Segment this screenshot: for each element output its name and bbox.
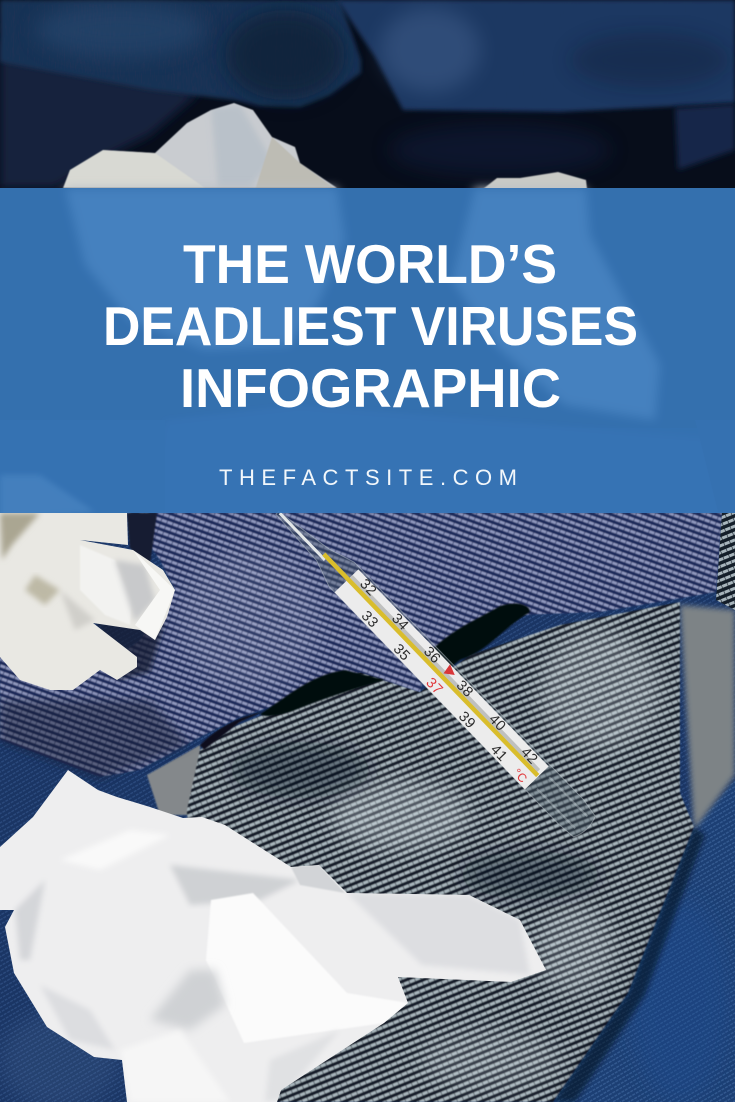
scale numbers: 36 (420, 644, 444, 667)
scale numbers (341, 576, 546, 787)
photo background: shapes behind banner (0, 188, 735, 520)
title: DEADLIEST VIRUSES (103, 295, 638, 357)
scale numbers: 41 (487, 742, 510, 765)
scale numbers: 38 (453, 678, 476, 701)
scale numbers: 35 (390, 641, 413, 665)
scale numbers: 39 (455, 709, 478, 732)
photo: blue twill fabric (0, 513, 735, 780)
grey scale bar (348, 575, 540, 773)
photo: striped grey fabric (187, 602, 705, 1102)
website: THEFACTSITE.COM (219, 465, 517, 490)
tissue upper left (0, 510, 180, 695)
scale numbers: 34 (388, 611, 412, 634)
fever marker (442, 664, 458, 680)
scale numbers: °C (510, 766, 530, 786)
photo: pale fabric on right (680, 605, 735, 830)
tube highlights (537, 777, 587, 828)
photo background: lower denim (0, 513, 735, 1102)
scale numbers: 37 (422, 675, 446, 698)
banner (0, 188, 735, 513)
title: THE WORLD’S (183, 233, 557, 295)
scale numbers: 33 (358, 608, 381, 631)
mercury column (322, 552, 539, 777)
photo background: denim top (0, 0, 735, 200)
capillary (279, 512, 326, 561)
title: INFOGRAPHIC (180, 357, 561, 419)
scale card (335, 569, 549, 789)
scale numbers: 40 (485, 711, 509, 735)
photo: pale felt patch at left (147, 745, 205, 815)
scale numbers: 32 (356, 576, 380, 600)
tissue lower left (0, 765, 550, 1102)
glass tube (267, 498, 600, 841)
scale numbers: 42 (517, 744, 541, 768)
thermometer (266, 498, 600, 842)
photo: dark fabric folds (200, 604, 530, 750)
title (103, 233, 638, 419)
photo background: tissue at top (60, 100, 587, 190)
